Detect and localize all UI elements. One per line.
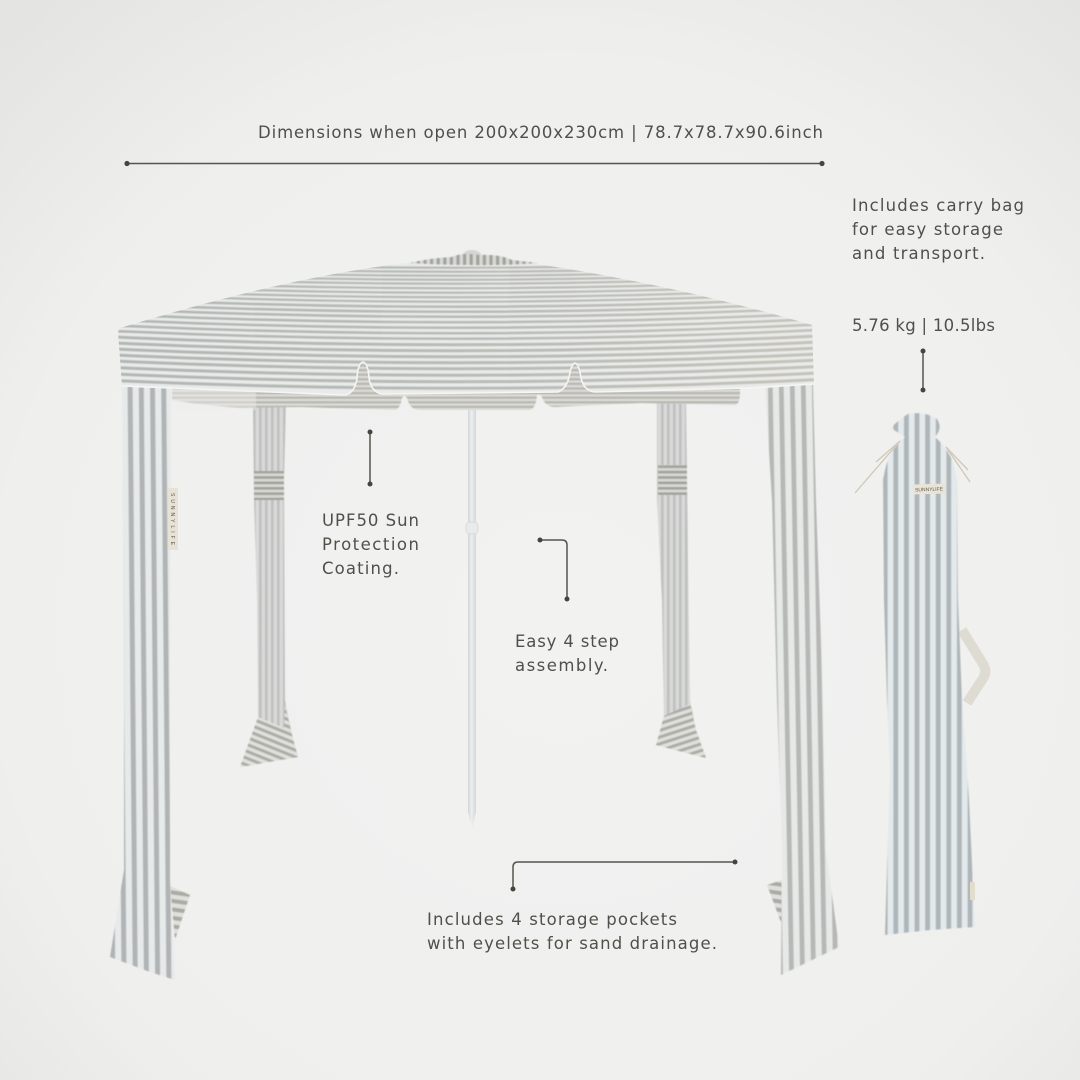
callout text: UPF50 (322, 511, 419, 578)
callout text: pockets: with eyelets for sand drainage. (427, 934, 717, 953)
front right leg (765, 384, 839, 975)
callout text: UPF50: Protection (322, 535, 419, 554)
callout text: UPF50: Coating. (322, 559, 399, 578)
callout text: carry bag (852, 196, 1024, 263)
front left pocket (170, 886, 190, 940)
back left leg band (254, 471, 284, 500)
back right leg band (658, 465, 687, 495)
brand tag on left leg: SUNNYLIFE (169, 493, 175, 546)
canopy top vent (410, 250, 538, 265)
bag brand tag (913, 483, 945, 495)
rear valance (172, 362, 740, 410)
dimensions label: Dimensions when open 200x200x230cm | 78.7x78.7x90.6inch (258, 123, 823, 142)
pole hub (466, 522, 478, 534)
back right leg of cabana (656, 403, 706, 758)
callout text: carry bag: and transport. (852, 244, 985, 263)
leader line: weight to bag (920, 348, 926, 392)
callout text: carry bag: for easy storage (852, 220, 1003, 239)
leader line: UPF (368, 430, 372, 486)
carry bag (855, 413, 975, 935)
canopy roof and valance (115, 259, 818, 395)
bag knot (891, 413, 940, 437)
bag ties (855, 441, 970, 493)
callout text: UPF50: UPF50 Sun (322, 511, 419, 530)
centre pole (466, 395, 478, 828)
bag bottom tag (970, 882, 975, 900)
back right pocket (656, 704, 706, 758)
callout text: assembly: assembly. (515, 656, 608, 675)
callout text: pockets (427, 910, 717, 953)
callout text: weight: 5.76 kg | 10.5lbs (852, 316, 995, 335)
carry bag strap (962, 630, 985, 703)
leader line: assembly (538, 538, 570, 602)
front right pocket (767, 880, 782, 925)
front left leg (110, 386, 175, 980)
leader line: pockets (510, 860, 738, 892)
callout text: assembly: Easy 4 step (515, 632, 619, 651)
callout text: assembly (515, 632, 619, 675)
callout text: carry bag: Includes carry bag (852, 196, 1024, 215)
back left leg of cabana (240, 404, 298, 767)
bag brand tag: SUNNYLIFE (915, 486, 944, 493)
back left pocket (240, 705, 298, 767)
callout text: pockets: Includes 4 storage pockets (427, 910, 677, 929)
dimension line (124, 161, 825, 166)
valance white trim (122, 362, 814, 395)
brand tag on left leg (168, 488, 178, 550)
